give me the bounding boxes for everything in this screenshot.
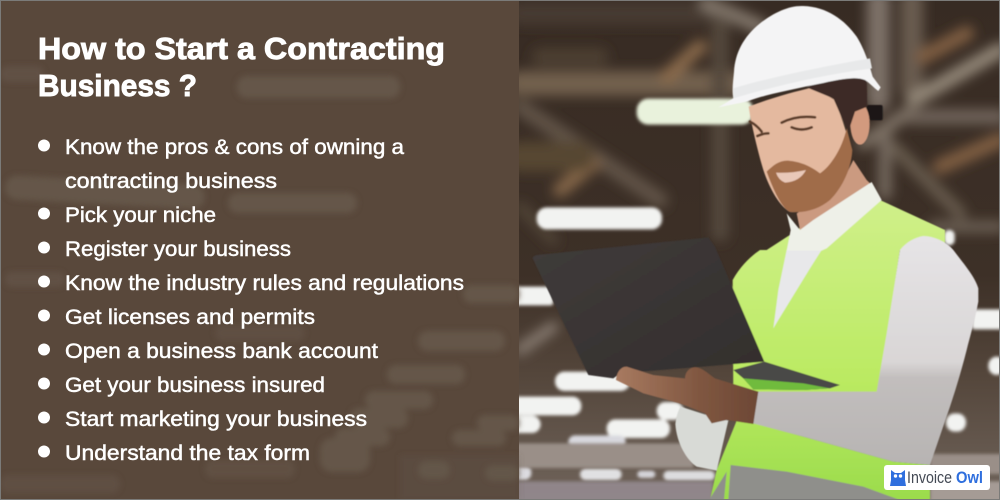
list item 7: Get your business insured: [65, 374, 325, 397]
laptop underside reflection: [743, 378, 830, 390]
list item 9: Understand the tax form: [65, 442, 310, 465]
left text panel: [0, 0, 519, 500]
list item 1: contracting business: [65, 170, 277, 193]
reflective strip: [710, 465, 900, 500]
face: [749, 87, 851, 212]
ear: [850, 103, 870, 145]
horizontal floor-level beams: [513, 443, 1000, 500]
shirt sleeve: [753, 236, 978, 465]
heading: [38, 31, 445, 103]
list item 8: Start marketing your business: [65, 408, 367, 431]
panel background: [0, 0, 519, 500]
list item 2: Pick your niche: [65, 204, 216, 227]
hard hat: [718, 6, 881, 107]
helmet strap: [867, 105, 883, 120]
mouth: [776, 170, 806, 183]
list item 1: [38, 136, 404, 193]
eyes and brows: [750, 117, 815, 136]
list item 3: Register your business: [65, 238, 291, 261]
laptop base: [733, 362, 840, 390]
photo background: blurred warehouse ceiling: [510, 0, 1000, 500]
shirt placket: [773, 250, 822, 328]
neck: [797, 160, 873, 230]
hair: [807, 78, 867, 132]
beard: [767, 128, 852, 212]
logo wordmark: Owl: [956, 468, 983, 487]
safety vest: [710, 200, 945, 500]
heading: How to Start a Contracting: [38, 31, 445, 66]
list item 4: Know the industry rules and regulations: [65, 272, 464, 295]
panel faint blurred photo overlay: [0, 66, 519, 500]
InvoiceOwl logo badge: [884, 465, 990, 490]
logo wordmark: Invoice: [907, 468, 952, 487]
bullet list: [38, 136, 464, 465]
warehouse ceiling lights: [510, 99, 1000, 481]
hand holding laptop: [616, 367, 758, 424]
list item 5: Get licenses and permits: [65, 306, 315, 329]
shirt collar: [787, 182, 882, 251]
icon: owl: [890, 470, 906, 486]
list item 1: Know the pros & cons of owning a: [65, 136, 404, 159]
worker: [533, 6, 978, 500]
laptop lid: [533, 237, 764, 378]
elbow of shirt sleeve: [675, 407, 728, 471]
list item 6: Open a business bank account: [65, 340, 378, 363]
hard hat brim shading: [733, 58, 872, 98]
heading: Business ?: [38, 68, 197, 103]
photo: engineer with laptop in a warehouse: [510, 0, 1000, 500]
